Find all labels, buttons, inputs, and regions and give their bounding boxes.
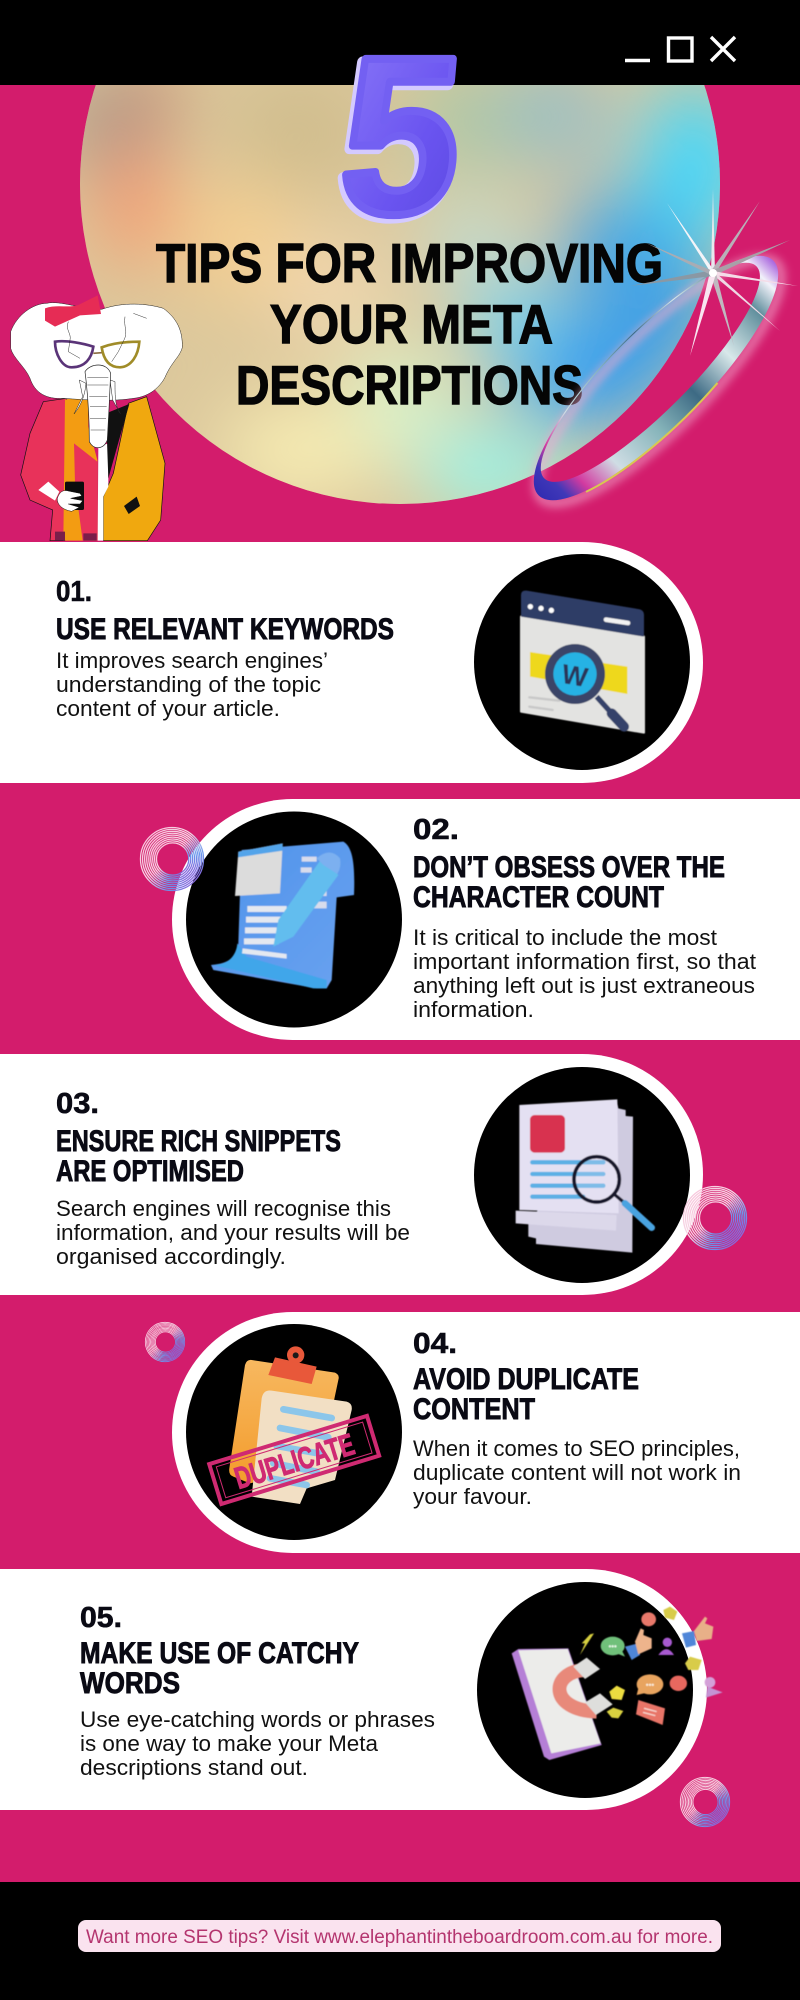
window control icons [625,37,735,61]
black circle [477,1582,693,1798]
body text: important information first, so that [413,949,756,974]
body text: content of your article. [56,696,280,721]
chrome ring with sparkle [505,189,800,532]
heading: USE RELEVANT KEYWORDS [56,613,394,646]
pocket [124,497,140,514]
number: 03. [56,1088,99,1120]
heading: CHARACTER COUNT [413,881,664,914]
footer call to action: Want more SEO tips? Visit www.elephantintheboardroom.com.au for more. [86,1927,713,1948]
number: 05. [80,1602,122,1634]
body text: Use eye-catching words or phrases [80,1707,435,1732]
icon: clipboard with duplicate stamp [209,1346,379,1504]
icon: close [711,37,735,61]
scarf [63,392,97,541]
tip 04 panel [145,1312,800,1553]
white pill [0,1054,703,1295]
icon: browser with magnifier [521,591,644,733]
black circle [474,554,690,770]
title [156,232,663,416]
white pill [172,799,800,1040]
heading: ENSURE RICH SNIPPETS [56,1125,341,1158]
deco swirl [145,1322,185,1362]
footer bar [0,1882,800,2000]
body text: It is critical to include the most [413,925,717,950]
black circle [186,812,402,1028]
tip 05 panel [0,1569,730,1827]
heading: ARE OPTIMISED [56,1155,244,1188]
body text: Search engines will recognise this [56,1196,391,1221]
heading: AVOID DUPLICATE [413,1363,639,1396]
icon: phone magnet attracting reactions [512,1607,723,1760]
phone [65,482,84,510]
deco swirl [680,1777,730,1827]
jacket left [21,398,67,541]
face lines [67,313,147,362]
head and ears [11,303,182,400]
ring body [505,227,800,529]
ring glow [508,230,800,532]
black circle [474,1067,690,1283]
black circle [186,1324,402,1540]
hand [57,491,83,511]
body text [413,925,756,1022]
body text: information. [413,997,534,1022]
body text: It improves search engines’ [56,648,328,673]
heading [413,1363,639,1426]
body text [413,1436,741,1509]
footer call to action [78,1920,721,1952]
icon: maximise [668,38,692,61]
deco swirl [140,827,204,891]
white pill [0,542,703,783]
big purple number 5: 5 [332,10,472,261]
body text [80,1707,435,1780]
title: YOUR META [270,293,553,355]
body text: your favour. [413,1484,532,1509]
gold jacket [103,397,165,541]
heading [56,1125,341,1188]
trunk [85,365,111,448]
white shirt [98,443,108,541]
deco swirl [683,1186,747,1250]
tip 03 panel [0,1054,747,1295]
stamp [209,1416,379,1504]
white pill [0,1569,707,1810]
bow [45,295,101,327]
icon: minimise [625,59,650,62]
white pill [172,1312,800,1553]
glasses left [55,341,93,367]
icon: documents and magnifier [516,1099,652,1253]
body text: organised accordingly. [56,1244,286,1269]
body text [56,648,328,721]
elephant mascot [11,295,182,541]
header bar [0,0,800,85]
heading [413,851,725,914]
tusks [74,380,121,414]
number: 04. [413,1328,457,1360]
trunk folds [87,377,108,430]
heading [80,1637,359,1700]
red inner top [74,443,97,541]
heading: CONTENT [413,1393,535,1426]
body text: When it comes to SEO principles, [413,1436,740,1461]
title: DESCRIPTIONS [236,354,583,416]
icon: phone magnet attracting reactions: ••• [646,1680,654,1689]
body text: information, and your results will be [56,1220,410,1245]
glasses bridge [93,350,102,356]
icon: document and pen [211,842,354,988]
ring yellow rim [586,372,719,504]
sparkle [630,189,798,356]
body text: anything left out is just extraneous [413,973,755,998]
icon: phone magnet attracting reactions: ••• [608,1642,617,1651]
number: 01. [56,576,92,608]
tip 01 panel [0,542,703,783]
body text: duplicate content will not work in [413,1460,741,1485]
body text: descriptions stand out. [80,1755,308,1780]
magnifier letter: W [559,658,590,693]
body text: is one way to make your Meta [80,1731,379,1756]
black lapel [106,404,129,478]
trouser hint [55,532,97,541]
heading: MAKE USE OF CATCHY [80,1637,359,1670]
title: TIPS FOR IMPROVING [156,232,663,294]
number: 02. [413,814,459,846]
glasses right [102,342,139,367]
big purple number 5: 5 [329,13,469,264]
iridescent orb [80,85,720,504]
tip 02 panel [140,799,800,1040]
white cuff [38,482,59,501]
heading: DON’T OBSESS OVER THE [413,851,725,884]
stamp: DUPLICATE [231,1427,358,1496]
body text: understanding of the topic [56,672,321,697]
heading: WORDS [80,1667,180,1700]
body text [56,1196,410,1269]
